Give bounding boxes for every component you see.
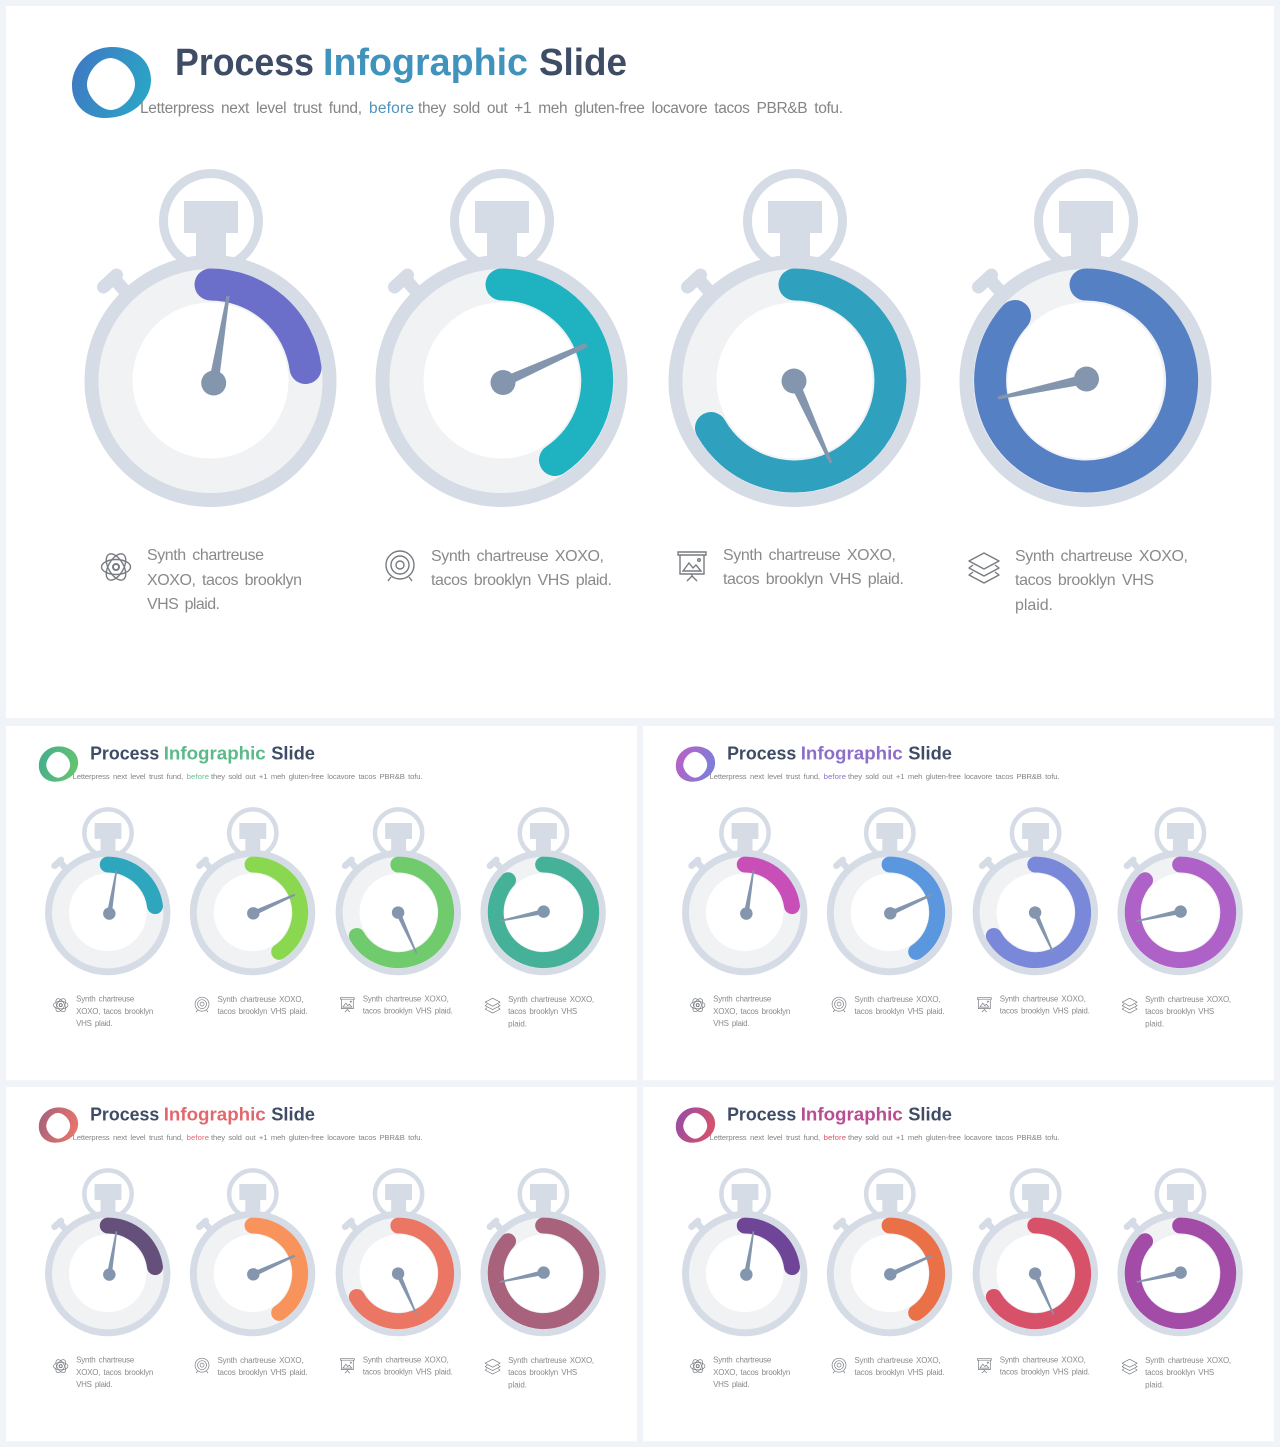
title: Infographic [801, 1104, 903, 1125]
label 3 [1000, 995, 1090, 1016]
label 4: Synth chartreuse XOXO, [508, 1356, 594, 1365]
label 2: Synth chartreuse XOXO, [854, 995, 941, 1004]
label 4 [508, 1356, 594, 1390]
stopwatch 4 [966, 174, 1204, 500]
icon: layers [969, 553, 999, 583]
label 3: Synth chartreuse XOXO, [723, 547, 896, 564]
subtitle: Letterpress next level trust fund, [73, 1133, 183, 1142]
icon: atom [691, 1358, 705, 1374]
label 4: Synth chartreuse XOXO, [1145, 995, 1231, 1004]
subtitle [73, 772, 422, 781]
label 3: Synth chartreuse XOXO, [363, 1356, 449, 1365]
logo [676, 746, 715, 782]
label 4: tacos brooklyn VHS [508, 1007, 577, 1016]
logo [676, 1107, 715, 1143]
label 1: Synth chartreuse [713, 995, 772, 1004]
label 4: plaid. [508, 1381, 527, 1390]
title [90, 743, 315, 764]
label 2 [854, 1356, 945, 1377]
stopwatch 4 [484, 1170, 602, 1333]
label 2 [431, 548, 612, 589]
label 3 [1000, 1356, 1090, 1377]
label 1: XOXO, tacos brooklyn [713, 1368, 790, 1377]
subtitle [140, 100, 843, 117]
stopwatch 3 [339, 1170, 458, 1333]
title: Infographic [801, 743, 903, 764]
icon: layers [1122, 1359, 1137, 1374]
label 3: Synth chartreuse XOXO, [1000, 1356, 1086, 1365]
label 1: XOXO, tacos brooklyn [713, 1007, 790, 1016]
label 4: tacos brooklyn VHS [1145, 1007, 1214, 1016]
label 1: VHS plaid. [713, 1380, 749, 1389]
subtitle: Letterpress next level trust fund, [140, 100, 362, 117]
label 3: tacos brooklyn VHS plaid. [363, 1007, 453, 1016]
label 4 [1015, 548, 1188, 614]
icon: presentation board [977, 1359, 991, 1373]
title: Infographic [164, 743, 266, 764]
stopwatch 1 [49, 1170, 167, 1333]
slide variant: magenta [643, 1087, 1274, 1441]
logo [72, 47, 151, 118]
icon: presentation board [340, 998, 354, 1012]
title [727, 743, 952, 764]
stopwatch 3 [976, 809, 1095, 972]
label 4: tacos brooklyn VHS [1145, 1368, 1214, 1377]
label 2 [854, 995, 945, 1016]
label 4: Synth chartreuse XOXO, [1145, 1356, 1231, 1365]
label 4: plaid. [1145, 1381, 1164, 1390]
label 2: tacos brooklyn VHS plaid. [431, 572, 612, 589]
subtitle [73, 1133, 422, 1142]
title: Infographic [164, 1104, 266, 1125]
main slide [6, 6, 1274, 718]
subtitle: they sold out +1 meh gluten-free locavore tacos PBR&B tofu. [848, 772, 1059, 781]
title: Process [727, 743, 796, 764]
title [175, 42, 627, 84]
title: Process [90, 1104, 159, 1125]
icon: layers [485, 1359, 500, 1374]
label 1 [713, 1356, 790, 1389]
subtitle: before [187, 772, 209, 781]
icon: atom [691, 997, 705, 1013]
slide variant: green [6, 726, 637, 1080]
title: Slide [539, 42, 627, 84]
subtitle: they sold out +1 meh gluten-free locavore tacos PBR&B tofu. [848, 1133, 1059, 1142]
stopwatch 1 [686, 809, 804, 972]
icon: presentation board [340, 1359, 354, 1373]
label 4: tacos brooklyn VHS [508, 1368, 577, 1377]
label 4 [508, 995, 594, 1029]
label 4: Synth chartreuse XOXO, [508, 995, 594, 1004]
subtitle: they sold out +1 meh gluten-free locavore tacos PBR&B tofu. [211, 1133, 422, 1142]
label 3: tacos brooklyn VHS plaid. [723, 571, 904, 588]
label 4 [1145, 995, 1231, 1029]
subtitle: Letterpress next level trust fund, [710, 772, 820, 781]
label 2: tacos brooklyn VHS plaid. [217, 1368, 308, 1377]
label 2: tacos brooklyn VHS plaid. [217, 1007, 308, 1016]
label 2 [217, 995, 308, 1016]
title: Process [727, 1104, 796, 1125]
title: Slide [271, 1104, 315, 1125]
icon: atom [102, 551, 130, 583]
subtitle: before [187, 1133, 209, 1142]
label 3 [363, 1356, 453, 1377]
label 2: Synth chartreuse XOXO, [431, 548, 604, 565]
label 1: XOXO, tacos brooklyn [76, 1368, 153, 1377]
icon: atom [54, 997, 68, 1013]
stopwatch 4 [1121, 809, 1239, 972]
title [727, 1104, 952, 1125]
label 1: XOXO, tacos brooklyn [76, 1007, 153, 1016]
label 1 [713, 995, 790, 1028]
label 4: Synth chartreuse XOXO, [1015, 548, 1188, 565]
icon: layers [1122, 998, 1137, 1013]
icon: target [832, 997, 846, 1012]
stopwatch 3 [976, 1170, 1095, 1333]
label 2 [217, 1356, 308, 1377]
subtitle: Letterpress next level trust fund, [73, 772, 183, 781]
stopwatch 3 [676, 174, 914, 500]
label 1: Synth chartreuse [147, 547, 264, 564]
logo [39, 746, 78, 782]
icon: target [832, 1358, 846, 1373]
label 3 [723, 547, 904, 588]
slide variant: purple [643, 726, 1274, 1080]
label 1: VHS plaid. [713, 1019, 749, 1028]
stopwatch 1 [92, 174, 330, 500]
label 1: VHS plaid. [76, 1380, 112, 1389]
icon: target [195, 997, 209, 1012]
icon: presentation board [678, 552, 706, 581]
stopwatch 2 [830, 1170, 949, 1333]
label 3: tacos brooklyn VHS plaid. [1000, 1368, 1090, 1377]
title: Slide [908, 1104, 952, 1125]
stopwatch 2 [193, 809, 312, 972]
subtitle: they sold out +1 meh gluten-free locavore tacos PBR&B tofu. [418, 100, 843, 117]
label 1: Synth chartreuse [76, 995, 135, 1004]
title: Slide [271, 743, 315, 764]
icon: presentation board [977, 998, 991, 1012]
label 4 [1145, 1356, 1231, 1390]
subtitle: they sold out +1 meh gluten-free locavore tacos PBR&B tofu. [211, 772, 422, 781]
subtitle: before [824, 772, 846, 781]
stopwatch 1 [49, 809, 167, 972]
label 2: tacos brooklyn VHS plaid. [854, 1007, 945, 1016]
label 2: tacos brooklyn VHS plaid. [854, 1368, 945, 1377]
stopwatch 2 [830, 809, 949, 972]
title: Process [90, 743, 159, 764]
subtitle: before [369, 100, 414, 117]
label 1: VHS plaid. [76, 1019, 112, 1028]
stopwatch 2 [193, 1170, 312, 1333]
subtitle [710, 772, 1059, 781]
subtitle: Letterpress next level trust fund, [710, 1133, 820, 1142]
icon: target [195, 1358, 209, 1373]
title: Slide [908, 743, 952, 764]
label 4: plaid. [508, 1020, 527, 1029]
label 3: Synth chartreuse XOXO, [1000, 995, 1086, 1004]
stopwatch 4 [1121, 1170, 1239, 1333]
icon: target [386, 551, 414, 581]
label 4: plaid. [1015, 597, 1053, 614]
title [90, 1104, 315, 1125]
label 1: Synth chartreuse [76, 1356, 135, 1365]
label 3: tacos brooklyn VHS plaid. [363, 1368, 453, 1377]
label 1: VHS plaid. [147, 596, 220, 613]
stopwatch 1 [686, 1170, 804, 1333]
label 2: Synth chartreuse XOXO, [217, 995, 304, 1004]
label 1 [76, 995, 153, 1028]
label 3: tacos brooklyn VHS plaid. [1000, 1007, 1090, 1016]
label 1 [147, 547, 302, 613]
stopwatch 3 [339, 809, 458, 972]
stopwatch 4 [484, 809, 602, 972]
subtitle: before [824, 1133, 846, 1142]
icon: atom [54, 1358, 68, 1374]
label 4: tacos brooklyn VHS [1015, 572, 1154, 589]
label 2: Synth chartreuse XOXO, [217, 1356, 304, 1365]
slide variant: coral [6, 1087, 637, 1441]
title: Infographic [323, 42, 528, 84]
subtitle [710, 1133, 1059, 1142]
icon: layers [485, 998, 500, 1013]
title: Process [175, 42, 314, 84]
stopwatch 2 [382, 174, 620, 500]
label 1 [76, 1356, 153, 1389]
label 1: Synth chartreuse [713, 1356, 772, 1365]
label 4: plaid. [1145, 1020, 1164, 1029]
label 1: XOXO, tacos brooklyn [147, 572, 302, 589]
label 2: Synth chartreuse XOXO, [854, 1356, 941, 1365]
label 3 [363, 995, 453, 1016]
logo [39, 1107, 78, 1143]
label 3: Synth chartreuse XOXO, [363, 995, 449, 1004]
